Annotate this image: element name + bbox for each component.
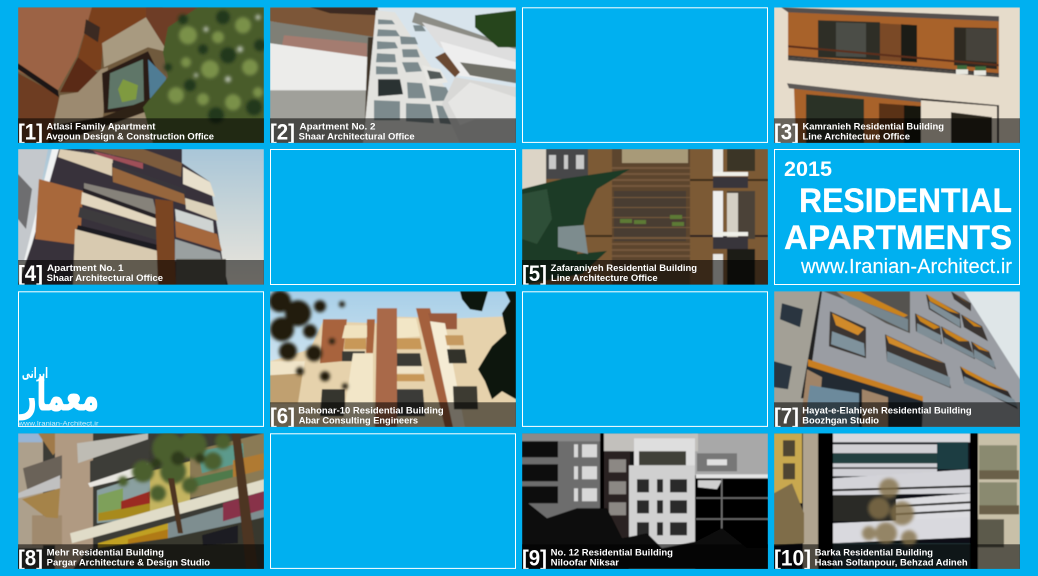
number: [6] (270, 403, 295, 428)
photo: black and white striped facade (774, 433, 1020, 569)
caption: Abar Consulting Engineers (299, 414, 418, 425)
caption band (270, 118, 516, 143)
caption: Bahonar-10 Residential Building (298, 404, 444, 415)
caption: Pargar Architecture & Design Studio (47, 556, 210, 567)
panel: 9 No. 12 Residential Building (522, 433, 768, 570)
panel: logo (17, 292, 264, 428)
caption: Niloofar Niksar (551, 556, 619, 567)
empty frame: row 1 column 3 (522, 8, 768, 142)
photo: grey facade with glowing orange recesses (774, 291, 1020, 427)
number: [5] (522, 261, 547, 286)
caption: No. 12 Residential Building (551, 546, 673, 557)
heading line 2: APARTMENTS (784, 219, 1012, 257)
number: [10] (774, 545, 811, 570)
title frame (774, 150, 1020, 284)
panel: 5 Zafaraniyeh Residential Building (522, 149, 768, 286)
panel: 6 Bahonar-10 Residential Building (269, 290, 516, 428)
panel: 7 Hayat-e-Elahiyeh Residential Building (774, 291, 1020, 428)
caption band (18, 544, 264, 569)
heading line 1: RESIDENTIAL (799, 182, 1012, 220)
panel: 1 Atlasi Family Apartment (18, 7, 266, 144)
website: www.Iranian-Architect.ir (800, 255, 1012, 278)
caption: Apartment No. 1 (47, 262, 124, 273)
caption band (522, 544, 768, 569)
photo: stone and wood facade (774, 7, 1020, 143)
photo: brick and foliage facade (18, 7, 266, 143)
caption: Hasan Soltanpour, Behzad Adineh (815, 556, 968, 567)
caption: Shaar Architectural Office (299, 130, 415, 141)
caption band (774, 118, 1020, 143)
caption: Atlasi Family Apartment (46, 120, 156, 131)
photo: white grid facade (270, 7, 516, 143)
photo: brick building with coloured glass and pine tree (18, 431, 264, 569)
photo: wood-clad apartment against sky (18, 149, 264, 285)
caption: Apartment No. 2 (300, 120, 376, 131)
panel: 10 Barka Residential Building (774, 433, 1020, 570)
number: [8] (18, 545, 43, 570)
caption: Line Architecture Office (551, 272, 658, 283)
caption: Line Architecture Office (802, 130, 910, 141)
caption band (774, 544, 1020, 569)
empty frame: row 4 column 2 (270, 434, 516, 568)
empty frame: row 2 column 2 (270, 150, 516, 284)
number: [2] (270, 119, 295, 144)
caption band (522, 260, 768, 285)
caption band (270, 402, 516, 427)
number: [3] (774, 119, 799, 144)
caption: Zafaraniyeh Residential Building (551, 262, 697, 273)
panel: 3 Kamranieh Residential Building (774, 7, 1020, 144)
photo: cream and brick building with trees (269, 290, 516, 427)
caption band (18, 260, 264, 285)
logo: small url: www.Iranian-Architect.ir (17, 420, 99, 428)
logo frame (18, 292, 264, 426)
number: [1] (18, 119, 43, 144)
panel: 2 Apartment No. 2 (270, 7, 516, 144)
caption: Hayat-e-Elahiyeh Residential Building (802, 404, 972, 415)
number: [4] (18, 261, 43, 286)
year: 2015 (784, 158, 832, 181)
empty frame: row 3 column 3 (522, 292, 768, 426)
caption band (774, 402, 1020, 427)
caption: Avgoun Design & Construction Office (46, 130, 214, 141)
panel: title (774, 150, 1020, 284)
panel: 4 Apartment No. 1 (18, 149, 264, 286)
logo: small word: ایرانی (22, 365, 48, 383)
caption: Mehr Residential Building (47, 546, 164, 557)
photo: timber louver facade with tree (522, 149, 768, 285)
caption: Boozhgan Studio (802, 414, 879, 425)
number: [9] (522, 545, 547, 570)
caption band (18, 118, 264, 143)
caption: Shaar Architectural Office (47, 272, 163, 283)
number: [7] (774, 403, 799, 428)
caption: Kamranieh Residential Building (802, 120, 944, 131)
logo: Memar Irani wordmark: معمار (19, 372, 99, 421)
photo: greyscale city block (522, 433, 768, 570)
panel: 8 Mehr Residential Building (18, 431, 264, 570)
caption: Barka Residential Building (815, 546, 933, 557)
